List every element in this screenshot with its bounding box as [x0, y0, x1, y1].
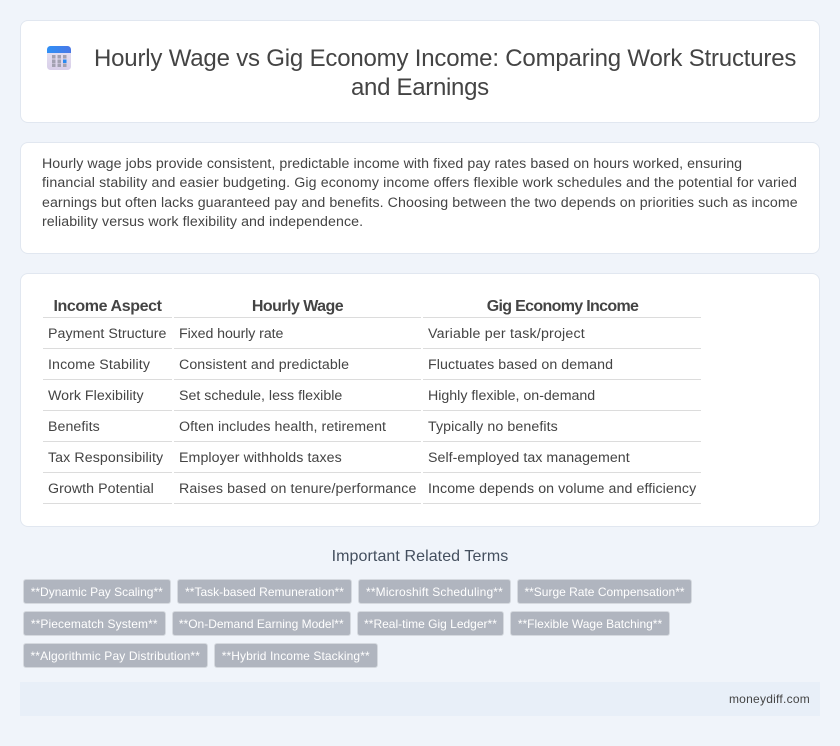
row: payment structure: Fixed hourly rate [179, 326, 283, 342]
row: growth potential [48, 481, 696, 497]
row: tax responsibility: Self-employed tax management [428, 450, 630, 466]
tag [517, 579, 692, 604]
heading: related terms: Important Related Terms [332, 548, 508, 565]
tag [510, 611, 670, 636]
row: benefits: Often includes health, retirement [179, 419, 386, 435]
panel: summary [20, 142, 820, 254]
panel: header [20, 20, 820, 123]
text block: summary paragraph: financial stability and easier budgeting. Gig economy income offers flexible work schedules and the potential for varied [42, 175, 797, 191]
tag [23, 579, 170, 604]
tag: **Dynamic Pay Scaling** [31, 585, 163, 599]
tag: **Hybrid Income Stacking** [222, 649, 370, 663]
tag [214, 643, 378, 668]
row: payment structure [48, 326, 585, 342]
tag [23, 611, 166, 636]
tag [358, 579, 511, 604]
row: growth potential: Growth Potential [48, 481, 154, 497]
row: benefits: Typically no benefits [428, 419, 558, 435]
table header: Gig Economy Income [487, 298, 638, 315]
row: income stability [48, 357, 613, 373]
footer source text: moneydiff.com [729, 692, 810, 706]
tag [177, 579, 352, 604]
row: tax responsibility: Employer withholds taxes [179, 450, 342, 466]
row: income stability: Income Stability [48, 357, 150, 373]
icon: calendar [47, 46, 71, 70]
tag [172, 611, 350, 636]
tag: **Surge Rate Compensation** [524, 585, 685, 599]
text block: summary paragraph: earnings but often lacks guaranteed pay and benefits. Choosing between the two depends on priorities such as income [42, 195, 798, 211]
row: growth potential: Raises based on tenure/performance [179, 481, 417, 497]
row: income stability: Fluctuates based on demand [428, 357, 613, 373]
row: tax responsibility: Tax Responsibility [48, 450, 163, 466]
title [94, 45, 796, 101]
footer [20, 682, 820, 716]
tag: **On-Demand Earning Model** [179, 617, 344, 631]
row: work flexibility [48, 388, 595, 404]
row: benefits [48, 419, 558, 435]
tag: **Flexible Wage Batching** [518, 617, 662, 631]
table header [53, 298, 638, 315]
title: Hourly Wage vs Gig Economy Income: Comparing Work Structures [94, 45, 796, 72]
row: work flexibility: Highly flexible, on-demand [428, 388, 595, 404]
row: work flexibility: Work Flexibility [48, 388, 144, 404]
panel: comparison table [20, 273, 820, 527]
text block: summary paragraph: Hourly wage jobs provide consistent, predictable income with fixed pay rates based on hours worked, ensuring [42, 156, 742, 172]
row: payment structure: Payment Structure [48, 326, 167, 342]
tag: **Microshift Scheduling** [366, 585, 503, 599]
tag: **Real-time Gig Ledger** [364, 617, 497, 631]
tag [23, 643, 208, 668]
table header: Hourly Wage [252, 298, 343, 315]
row: work flexibility: Set schedule, less flexible [179, 388, 342, 404]
row: benefits: Benefits [48, 419, 100, 435]
row: tax responsibility [48, 450, 630, 466]
row: payment structure: Variable per task/project [428, 326, 585, 342]
tag: **Algorithmic Pay Distribution** [30, 649, 200, 663]
text block: summary paragraph: reliability versus work flexibility and independence. [42, 214, 363, 230]
tag: **Task-based Remuneration** [185, 585, 344, 599]
row: growth potential: Income depends on volume and efficiency [428, 481, 696, 497]
row: income stability: Consistent and predictable [179, 357, 349, 373]
tag: **Piecematch System** [31, 617, 158, 631]
tags: related terms [23, 579, 692, 668]
text block: summary paragraph [42, 156, 798, 230]
tag [357, 611, 504, 636]
table header: Income Aspect [53, 298, 162, 315]
title: and Earnings [351, 74, 489, 101]
